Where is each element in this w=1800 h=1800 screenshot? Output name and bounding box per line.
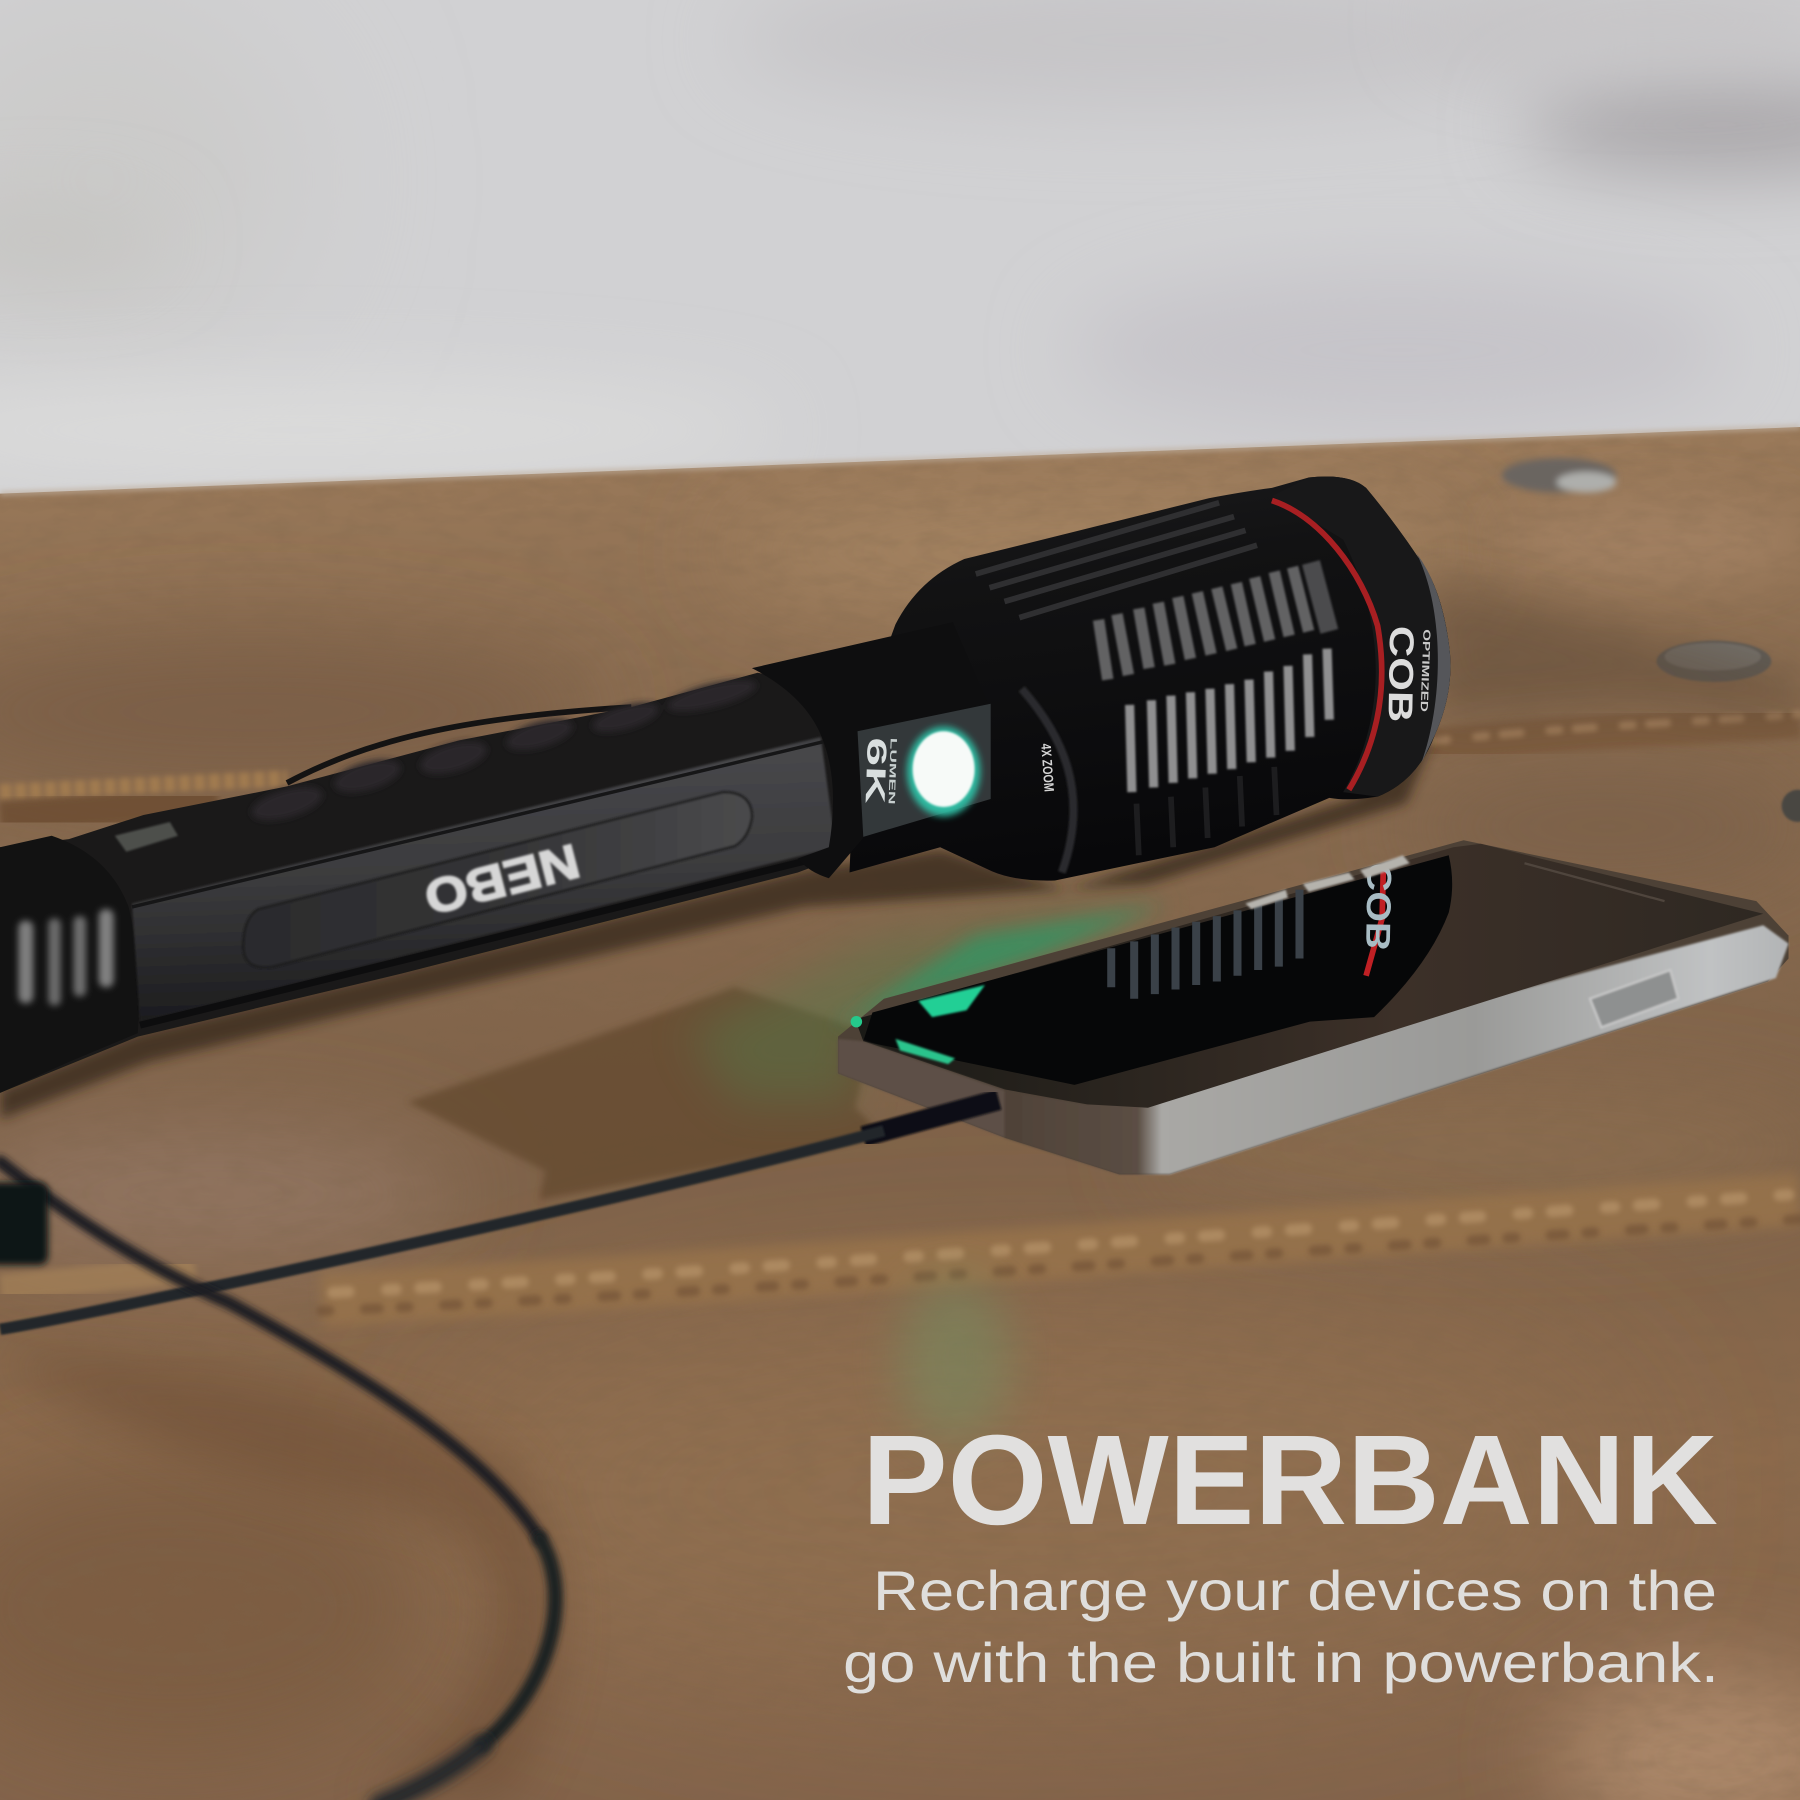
wood seam: upper left ridge (0, 778, 287, 817)
flashlight: body panel (132, 737, 836, 1022)
flashlight: lower dark fins (1136, 767, 1277, 855)
flashlight: lumen label: 6K (860, 737, 893, 805)
phone: top edge glints (1246, 855, 1410, 909)
flashlight: zoom ring (1022, 689, 1073, 872)
rivet: middle (1657, 641, 1771, 682)
lanyard cord (287, 707, 631, 783)
phone: screen (855, 844, 1763, 1108)
flashlight: collar block (752, 622, 987, 878)
background: blurred wall (0, 0, 1800, 560)
flashlight: tail ridges (18, 909, 114, 1006)
green reflection on table foreground (898, 1278, 1013, 1443)
phone: reflected red ring (1366, 870, 1383, 976)
charging cable (0, 1131, 884, 1329)
flashlight: brand text: NEBO (419, 833, 585, 925)
soft cast shadow on lower table (0, 1355, 561, 1800)
phone: flashlight reflection (863, 855, 1452, 1085)
phone: green edge glint (895, 1039, 955, 1064)
phone: lower left case (838, 1039, 1004, 1138)
shadow under flashlight (0, 735, 1435, 1119)
flashlight: zoom label: 4X ZOOM (1038, 743, 1057, 792)
phone: silver side edge (1004, 925, 1789, 1174)
flashlight: lumen label (860, 737, 899, 805)
flashlight: grip silhouette (0, 673, 844, 1093)
rivet: right edge (1782, 790, 1800, 822)
green tint around phone corner (689, 901, 1171, 1102)
flashlight: lower cooling ribs (1130, 649, 1329, 792)
flashlight: optimized label: OPTIMIZED (1418, 629, 1431, 713)
text block: description: go with the built in powerbank. (843, 1631, 1719, 1694)
wood seam: lower stitched ridge (0, 1194, 1800, 1311)
table: wooden surface (0, 413, 1800, 1800)
green glow on table (832, 905, 1165, 1027)
phone: corner LED dot (851, 1016, 862, 1027)
text block: description: Recharge your devices on the (873, 1559, 1717, 1622)
flashlight: switch plate (858, 704, 991, 837)
flashlight: small button label (115, 822, 178, 852)
phone: case outline (838, 840, 1789, 1174)
flashlight: lumen label: LUMEN (886, 738, 899, 805)
flashlight: red ring (1272, 501, 1382, 790)
charging connector (863, 1100, 999, 1136)
flashlight: COB label: COB (1380, 625, 1420, 723)
flashlight: recessed pill (243, 792, 752, 967)
loose cable loop (0, 1162, 555, 1800)
flashlight: tail cap (0, 836, 139, 1093)
flashlight: bezel (1272, 476, 1450, 797)
flashlight: lens face (1417, 553, 1450, 763)
table back edge (0, 427, 1800, 494)
rivet: top (1502, 458, 1616, 492)
shadow right of flashlight head (1418, 574, 1800, 717)
phone: reflected button (918, 985, 985, 1017)
shadow patch beside phone (408, 987, 884, 1200)
flashlight: upper cooling ribs (1099, 563, 1329, 680)
heading: POWERBANK: POWERBANK (862, 1409, 1718, 1552)
wood seam: upper right ridge (1429, 714, 1800, 746)
phone (838, 840, 1789, 1174)
phone: button highlight (1590, 970, 1678, 1027)
flashlight: upper groove (132, 740, 829, 907)
flashlight: upper fin highlights (976, 503, 1257, 618)
phone: reflected COB label: COB (1360, 863, 1399, 951)
phone: reflected ribs (1111, 890, 1299, 999)
blurred plug at left edge (0, 1182, 48, 1265)
flashlight: grip scallops (248, 673, 759, 827)
flashlight: head (849, 476, 1450, 881)
flashlight (0, 476, 1450, 1093)
text block: description (843, 1559, 1719, 1694)
phone: earpiece line (1524, 863, 1665, 901)
flashlight: glowing power button (907, 727, 980, 816)
